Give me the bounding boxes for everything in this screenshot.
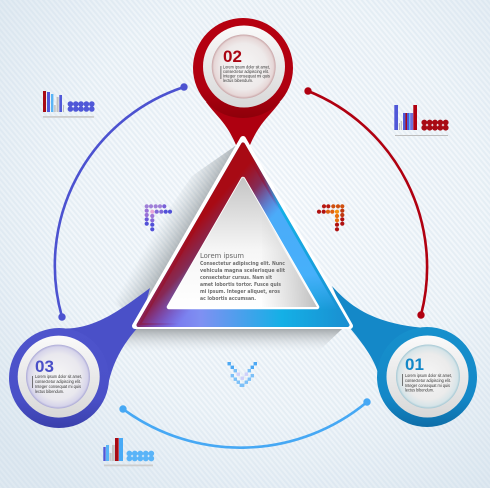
center body text: [200, 261, 285, 302]
inner disc: [396, 344, 460, 408]
number: 01: [405, 355, 424, 374]
inner disc: [212, 34, 276, 98]
pin: 01 blue: [332, 286, 477, 427]
center body text: mi ipsum. Integer aliquet, eros: [200, 289, 280, 295]
body text: consectetur adipiscing elit.: [405, 378, 451, 383]
body text: lectus bibendum.: [405, 388, 434, 392]
body text: Lorem ipsum dolor sit amet,: [223, 64, 270, 70]
white ring: [18, 336, 100, 418]
center body text: consectetur cursus. Nam sit: [200, 275, 272, 281]
white ring: [203, 26, 285, 108]
coloured band: [138, 144, 348, 325]
number: 03: [35, 357, 54, 376]
center body text: amet lobortis tortor. Fusce quis: [200, 282, 281, 288]
central triangle: [135, 139, 350, 326]
arc: blue connector: [55, 83, 188, 321]
body text: [405, 373, 452, 392]
center heading: Lorem ipsum: [200, 251, 244, 260]
divider bar: [31, 376, 34, 388]
dotted arrow: upper right: [317, 204, 344, 231]
dotted arrow: upper left: [145, 204, 172, 231]
body text: lectus bibendum.: [223, 78, 253, 83]
inner white triangle: [169, 179, 317, 307]
center body text: Consectetur adipiscing elit. Nunc: [200, 261, 285, 267]
body text: [223, 64, 270, 83]
body text: lectus bibendum.: [35, 389, 64, 394]
body text: consectetur adipiscing elit.: [223, 69, 269, 74]
arc: red connector: [304, 87, 427, 319]
body text: Lorem ipsum dolor sit amet,: [405, 373, 452, 378]
inner disc: [26, 345, 90, 409]
body text: Lorem ipsum dolor sit amet,: [35, 374, 82, 379]
pin: 03 purple: [9, 288, 150, 428]
body text: Integer consequat mi quis: [223, 74, 270, 78]
triangle shadow: [108, 144, 342, 352]
bar chart: bottom left: [103, 438, 154, 466]
white border: [135, 139, 350, 326]
dotted arrow: bottom: [228, 362, 257, 387]
white ring: [386, 336, 468, 418]
number: 02: [223, 47, 242, 66]
center body text: ac lobortis accumsan.: [200, 296, 256, 302]
divider bar: [220, 66, 222, 79]
body text: Integer consequat mi quis: [405, 383, 450, 388]
arc: light blue connector: [119, 398, 371, 448]
pin: 02 red: [193, 18, 293, 145]
body text: consectetur adipiscing elit.: [35, 379, 81, 384]
body text: Integer consequat mi quis: [35, 384, 81, 389]
center body text: vehicula magna scelerisque elit: [200, 268, 285, 274]
body text: [35, 374, 82, 394]
divider bar: [401, 374, 404, 386]
bar chart: top right: [394, 105, 449, 136]
bar chart: top left: [43, 91, 95, 118]
